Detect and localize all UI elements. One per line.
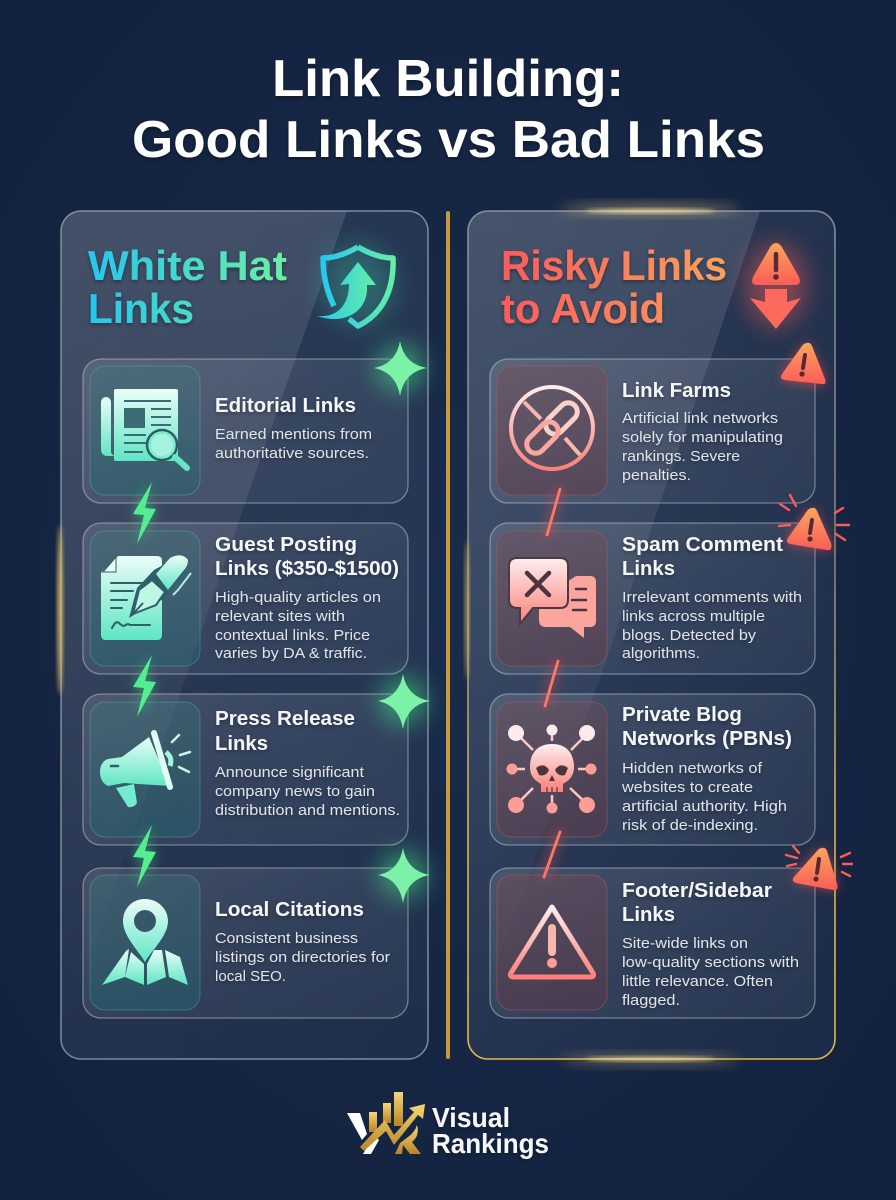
text: local citations: listings on directories for [215,949,390,966]
text: footer sidebar links [622,880,799,1009]
text: private blog networks: risk of de-indexing. [622,817,758,834]
icon: spam speech bubbles [509,558,596,638]
logo wordmark [432,1102,549,1159]
heading: risky links to avoid: Risky Links [501,242,727,289]
icon: megaphone [100,733,190,807]
card: local citations [83,868,408,1018]
text: link farms: rankings. Severe [622,448,740,465]
text: private blog networks: Private Blog [622,704,742,726]
text: footer sidebar links: Links [622,904,675,926]
text: guest posting links: High-quality articles on [215,589,381,606]
center divider [446,211,450,1059]
text: footer sidebar links: low-quality sections with [622,954,799,971]
heading: white hat links [88,242,287,332]
text: editorial links: authoritative sources. [215,445,369,462]
heading: white hat links: White Hat [88,242,287,289]
text: editorial links: Earned mentions from [215,426,372,443]
icon: shield with up arrow [317,243,396,327]
icon: red connector 3 [544,832,560,877]
text: link farms: penalties. [622,467,691,484]
text: private blog networks: Hidden networks of [622,760,763,777]
card: private blog networks [490,694,815,845]
text: private blog networks [621,704,792,834]
text: footer sidebar links: Footer/Sidebar [622,880,772,902]
icon: newspaper with magnifier [101,389,187,468]
icon: green sparkle 3 [378,848,430,903]
card: guest posting links [83,523,408,674]
card: editorial links [83,359,408,503]
icon: warning badge 3 with rays [786,846,852,890]
text: private blog networks: websites to create [621,779,753,796]
text: press release links: distribution and mentions. [215,802,400,819]
heading: risky links to avoid: to Avoid [501,285,665,332]
icon: green sparkle 1 [374,341,427,396]
text: link farms: Link Farms [622,380,731,402]
text: guest posting links [215,534,399,662]
text: spam comment links: links across multiple [622,608,765,625]
text: private blog networks: artificial authority. High [622,798,787,815]
icon: warning badge 2 with rays [779,495,849,550]
icon: lightning connector 2 [133,655,156,717]
title: Link Building: [272,50,624,108]
text: local citations: local SEO. [215,968,286,985]
text: footer sidebar links: Site-wide links on [622,935,748,952]
text: private blog networks: Networks (PBNs) [622,728,792,750]
text: spam comment links: Links [622,558,675,580]
text: press release links [215,708,400,819]
icon: warning with down arrow [746,243,806,329]
text: guest posting links: varies by DA & traffic. [215,645,367,662]
card: link farms [490,359,815,503]
text: editorial links [215,395,372,462]
text: guest posting links: Links ($350-$1500) [215,558,399,580]
panel: white hat links [58,211,430,1059]
text: local citations: Local Citations [215,899,364,921]
text: spam comment links: Irrelevant comments with [622,589,802,606]
icon: red connector 2 [545,661,558,706]
text: guest posting links: contextual links. Price [215,627,370,644]
text: press release links: Links [215,733,268,755]
card: footer sidebar links [490,868,815,1018]
icon: lightning connector 1 [133,482,156,544]
icon: green sparkle 2 [378,674,430,729]
text: guest posting links: relevant sites with [215,608,345,625]
icon: skull network [506,724,596,814]
text: footer sidebar links: little relevance. Often [622,973,773,990]
logo: visual rankings [347,1092,549,1159]
icon: lightning connector 3 [133,825,156,887]
text: editorial links: Editorial Links [215,395,356,417]
text: guest posting links: Guest Posting [215,534,357,556]
logo wordmark: Visual [432,1102,510,1133]
text: spam comment links: blogs. Detected by [622,627,757,644]
text: spam comment links: Spam Comment [622,534,783,556]
text: footer sidebar links: flagged. [622,992,680,1009]
icon: warning badge 1 [780,342,826,385]
text: link farms: solely for manipulating [622,429,783,446]
icon: outlined warning triangle [510,907,594,977]
icon: map pin [102,899,188,985]
icon: chain in prohibition circle [511,387,593,469]
text: spam comment links [622,534,802,662]
text: press release links: company news to gain [215,783,375,800]
card: spam comment links [490,523,815,674]
icon: red connector 1 [547,489,560,535]
icon: document and fountain pen [101,555,191,640]
title: Good Links vs Bad Links [132,111,765,169]
text: press release links: Press Release [215,708,355,730]
logo mark [347,1092,425,1154]
text: spam comment links: algorithms. [622,645,700,662]
text: link farms [622,380,783,484]
logo wordmark: Rankings [432,1128,549,1159]
text: local citations: Consistent business [215,930,358,947]
text: link farms: Artificial link networks [622,410,778,427]
heading: white hat links: Links [88,285,194,332]
text: press release links: Announce significant [215,764,365,781]
panel: risky links to avoid [465,204,852,1065]
heading: risky links to avoid [501,242,727,332]
title [132,50,765,169]
card: press release links [83,694,408,845]
text: local citations [215,899,390,985]
